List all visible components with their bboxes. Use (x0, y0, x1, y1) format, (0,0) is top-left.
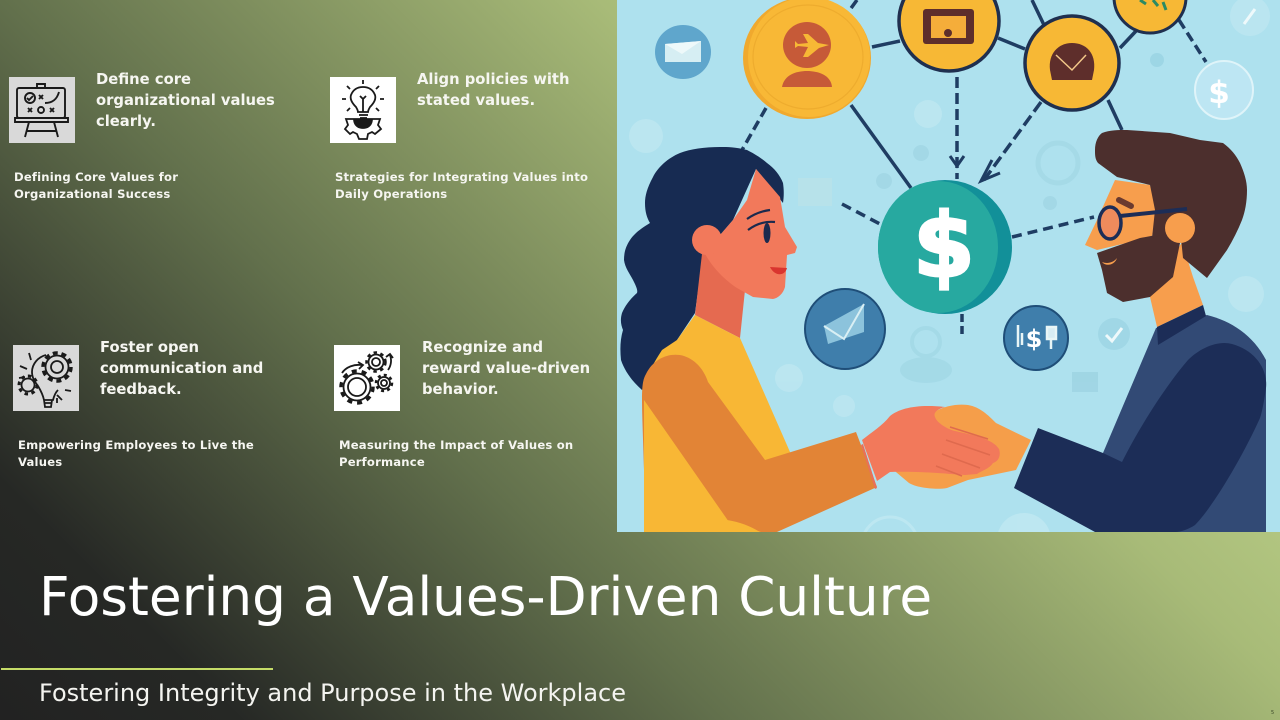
slide number: 5 (1271, 710, 1274, 716)
item 1 caption: Defining Core Values for (14, 170, 178, 184)
item 3 caption: Values (18, 455, 62, 469)
coin: tablet (899, 0, 999, 71)
item 4 heading (422, 338, 590, 398)
item 1 caption (14, 170, 178, 201)
faint background icons (629, 0, 1270, 573)
icon: blue dollar badge (1004, 306, 1068, 370)
item 1 heading: Define core (96, 70, 191, 88)
item 2 caption: Strategies for Integrating Values into (335, 170, 588, 184)
coin: airplane person (743, 0, 871, 119)
illustration: handshake and value coins (617, 0, 1280, 532)
item 2 heading (417, 70, 569, 109)
item 4 heading: reward value-driven (422, 360, 590, 377)
coin: top right (1114, 0, 1186, 33)
accent line (1, 668, 273, 670)
icon: faint dollar circle: $ (1208, 75, 1230, 111)
item 4 caption: Performance (339, 455, 425, 469)
item 4 icon tile: gears with arrows (334, 345, 400, 411)
item 3 heading (100, 338, 263, 398)
icon: blue envelope badge (805, 289, 885, 369)
item 3 heading: Foster open (100, 338, 199, 356)
handshake (861, 405, 1031, 489)
item 4 caption: Measuring the Impact of Values on (339, 438, 573, 452)
item 1 icon tile: strategy board (9, 77, 75, 143)
subtitle: Fostering Integrity and Purpose in the Workplace (39, 679, 626, 707)
item 1 heading: clearly. (96, 113, 156, 130)
item 1 heading: organizational values (96, 92, 275, 109)
item 4 heading: Recognize and (422, 338, 543, 356)
coin: teal dollar (878, 180, 1012, 314)
woman (620, 147, 877, 532)
icon: faint dollar circle (1195, 61, 1253, 119)
item 3 heading: communication and (100, 360, 263, 377)
title: Fostering a Values-Driven Culture (39, 566, 932, 628)
item 3 caption (18, 438, 254, 469)
item 1 heading (96, 70, 275, 130)
item 2 caption (335, 170, 588, 201)
item 2 caption: Daily Operations (335, 187, 447, 201)
item 4 heading: behavior. (422, 381, 499, 398)
connector lines (742, 0, 1206, 336)
item 3 icon tile: bulb with gears (13, 345, 79, 411)
coin: teal dollar: $ (913, 194, 975, 297)
icon: blue dollar badge: $ (1026, 325, 1042, 353)
man (1014, 130, 1266, 532)
coin: envelope (1025, 16, 1119, 110)
item 1 caption: Organizational Success (14, 187, 170, 201)
item 2 heading: stated values. (417, 92, 535, 109)
icon: blue envelope circle (655, 25, 711, 79)
item 4 caption (339, 438, 573, 469)
item 3 caption: Empowering Employees to Live the (18, 438, 254, 452)
item 2 icon tile: light bulb and gear (330, 77, 396, 143)
item 3 heading: feedback. (100, 381, 182, 398)
item 2 heading: Align policies with (417, 70, 569, 88)
